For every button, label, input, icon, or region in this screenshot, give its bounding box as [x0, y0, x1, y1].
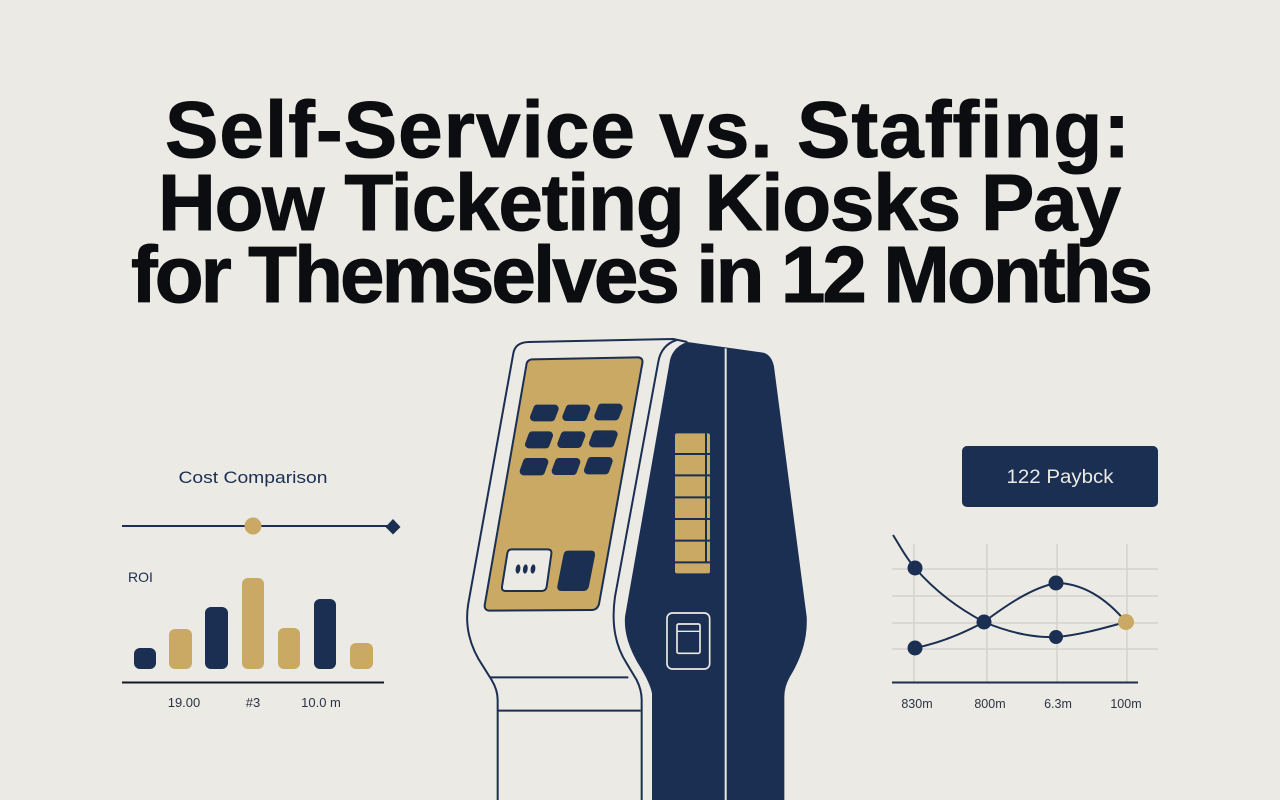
- title: [131, 85, 1153, 319]
- line chart axis labels: [901, 697, 1142, 711]
- icon: ticketing kiosk: [467, 339, 807, 800]
- bar chart axis labels: 10.0 m: [301, 695, 341, 710]
- heading: cost comparison: Cost Comparison: [178, 468, 328, 487]
- white button with dots: [502, 549, 551, 591]
- title: Self-Service vs. Staffing:: [165, 85, 1130, 174]
- line chart axis labels: 830m: [901, 697, 933, 711]
- panel: payback: [892, 446, 1158, 711]
- bar chart axis labels: 19.00: [168, 695, 200, 710]
- kiosk navy side panel: [625, 342, 807, 800]
- card reader: [667, 613, 710, 669]
- title: for Themselves in 12 Months: [131, 230, 1153, 319]
- slider with gold marker and diamond end: [122, 518, 400, 534]
- callout: payback badge: [962, 446, 1158, 507]
- side panel centre seam: [723, 348, 729, 800]
- gold touch screen: [485, 357, 642, 611]
- panel: cost comparison: [122, 468, 400, 710]
- title: How Ticketing Kiosks Pay: [158, 158, 1122, 247]
- gold ticket slot strip: [675, 433, 710, 573]
- bar chart axis labels: [168, 695, 341, 710]
- navy screen button: [557, 551, 595, 591]
- screen keypad: [524, 408, 619, 471]
- kiosk base lines: [490, 677, 641, 711]
- line chart axis labels: 100m: [1110, 697, 1142, 711]
- callout: payback badge: 122 Paybck: [1006, 467, 1114, 488]
- label: ROI: ROI: [128, 569, 153, 585]
- bar chart: [122, 578, 384, 682]
- bar chart axis labels: #3: [246, 695, 260, 710]
- kiosk front body outline: [467, 339, 687, 800]
- line chart axis labels: 6.3m: [1044, 697, 1072, 711]
- line chart: [892, 535, 1158, 682]
- line chart axis labels: 800m: [974, 697, 1006, 711]
